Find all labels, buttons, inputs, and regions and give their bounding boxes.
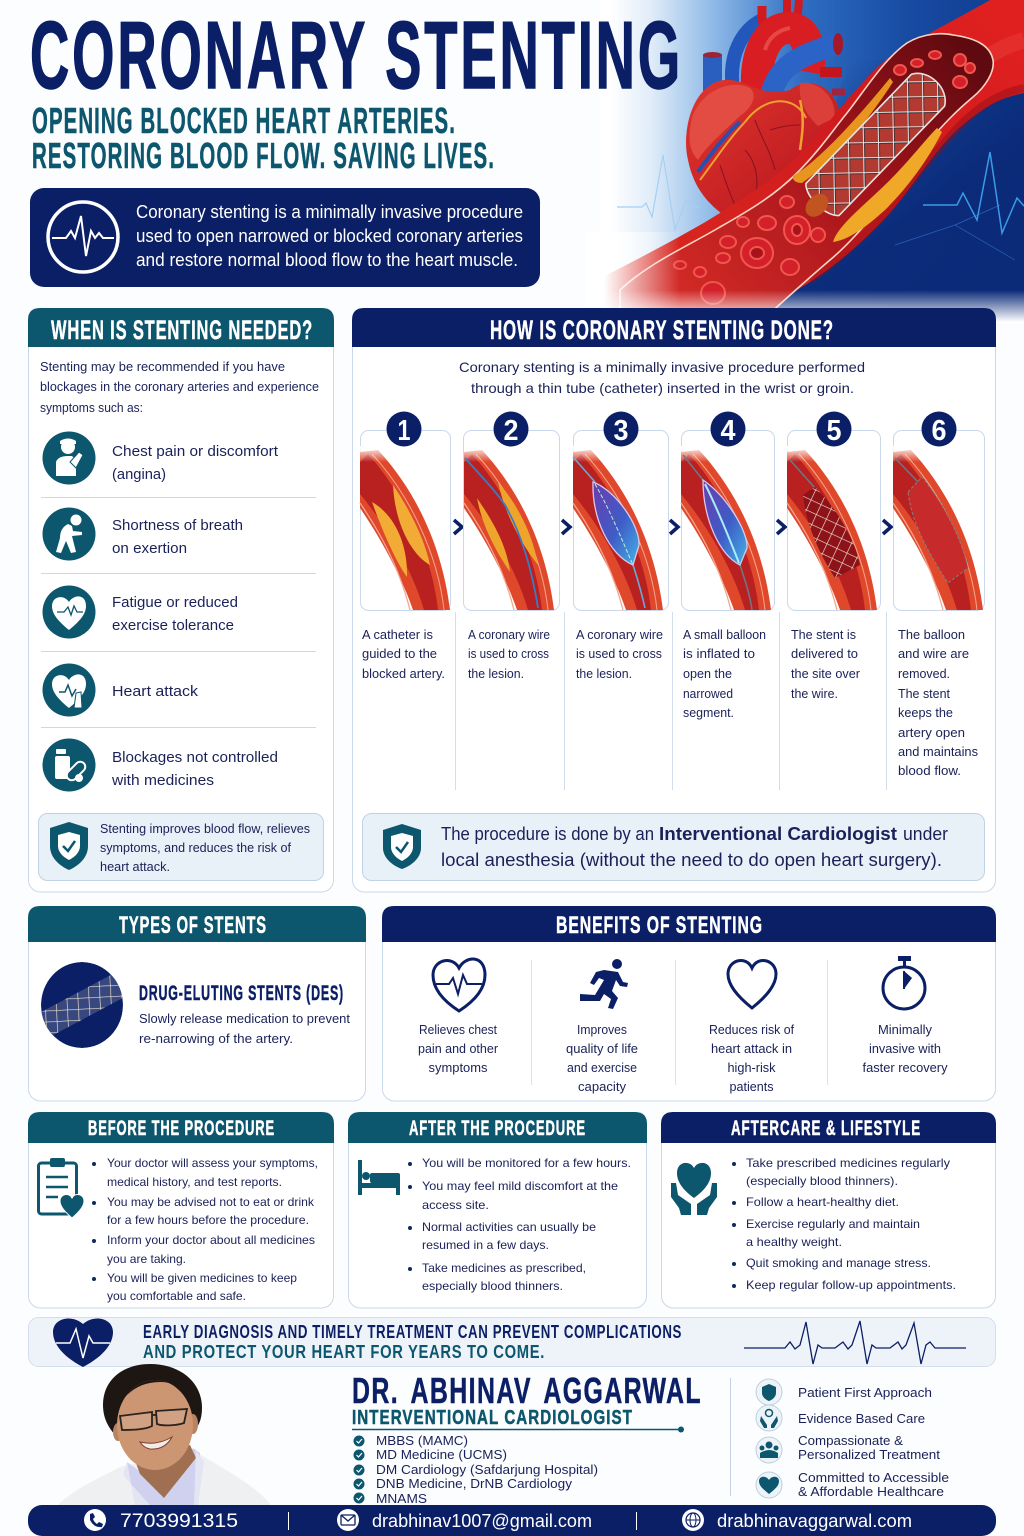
doctor name and title: INTERVENTIONAL CARDIOLOGIST — [352, 1407, 633, 1429]
qualifications list — [354, 1434, 598, 1506]
step 6: and maintains — [898, 745, 978, 759]
step 2: 2 — [504, 415, 518, 447]
values list: Evidence Based Care — [798, 1412, 925, 1426]
benefit 2 text: and exercise — [567, 1061, 637, 1075]
step 1: A catheter is — [362, 628, 433, 642]
doctor name and title — [352, 1370, 702, 1432]
qualifications list: MD Medicine (UCMS) — [376, 1448, 507, 1462]
symptom: fatigue: Fatigue or reduced — [112, 594, 238, 611]
icon: shield — [756, 1379, 782, 1405]
panel header: AFTER THE PROCEDURE — [409, 1117, 586, 1140]
panel: types of stents — [28, 906, 366, 1101]
bullet list: for a few hours before the procedure. — [107, 1213, 309, 1227]
bullet list: Inform your doctor about all medicines — [107, 1233, 315, 1247]
benefit 4 text: faster recovery — [862, 1061, 948, 1075]
step 5 — [787, 412, 880, 701]
icon: heart — [756, 1472, 782, 1498]
step 3: A coronary wire — [576, 628, 663, 642]
symptom: medicines — [111, 749, 278, 789]
panel: aftercare and lifestyle — [661, 1112, 996, 1308]
step 6 — [893, 412, 984, 778]
ECG line — [744, 1321, 966, 1364]
arrow 3 — [670, 520, 678, 534]
heart lobes and vessels — [690, 83, 835, 205]
step 5: the site over — [791, 667, 860, 681]
values list: Patient First Approach — [798, 1386, 932, 1400]
bullet list: You may be advised not to eat or drink — [107, 1195, 315, 1209]
panel header — [382, 906, 996, 942]
step 4: A small balloon — [683, 628, 766, 642]
hero fades — [585, 232, 680, 322]
subtitle: RESTORING BLOOD FLOW. SAVING LIVES. — [32, 135, 495, 176]
ECG trace left — [617, 155, 700, 230]
arrow 4 — [777, 520, 785, 534]
bullet list: Take medicines as prescribed, — [422, 1261, 586, 1275]
symptom: chest pain: Chest pain or discomfort — [112, 443, 279, 460]
bullet list: resumed in a few days. — [422, 1238, 549, 1252]
website: drabhinavaggarwal.com — [717, 1511, 912, 1531]
benefit 2 text: quality of life — [566, 1042, 638, 1056]
bullet list: medical history, and test reports. — [107, 1175, 282, 1189]
bullet list: You may feel mild discomfort at the — [422, 1179, 618, 1193]
benefit 1 text: Relieves chest — [419, 1023, 497, 1037]
symptom: breath: on exertion — [112, 540, 187, 557]
benefit 1 text — [418, 1023, 498, 1075]
panel header — [661, 1112, 996, 1143]
bullet list: Keep regular follow-up appointments. — [746, 1278, 956, 1292]
icon: heart with ECG — [433, 959, 485, 1011]
panel header — [348, 1112, 647, 1143]
intro text: through a thin tube (catheter) inserted in the wrist or groin. — [471, 380, 854, 396]
stent type description — [139, 1011, 350, 1046]
benefit 3 text: heart attack in — [711, 1042, 792, 1056]
heart body — [686, 80, 839, 216]
step 2: the lesion. — [468, 667, 524, 681]
bullet list: access site. — [422, 1198, 489, 1212]
subtitle — [32, 100, 495, 176]
step 3: the lesion. — [576, 667, 632, 681]
artery lumen — [620, 34, 993, 316]
arrow 5 — [883, 520, 891, 534]
icon: heart attack — [42, 664, 96, 716]
bullet list: Take prescribed medicines regularly — [746, 1156, 950, 1170]
intro text: blockages in the coronary arteries and experience — [40, 380, 319, 394]
step 4: 4 — [720, 415, 736, 447]
symptom: heart attack: Heart attack — [112, 683, 199, 700]
bullet list: you comfortable and safe. — [107, 1289, 246, 1303]
values list: Personalized Treatment — [798, 1448, 941, 1462]
symptom: fatigue — [112, 594, 238, 634]
icon: stent image — [41, 962, 123, 1048]
icon: heart in hands — [671, 1163, 717, 1215]
icon: hospital bed — [358, 1160, 400, 1195]
step 6: 6 — [932, 415, 946, 447]
benefit 3 text: patients — [730, 1080, 774, 1094]
benefit 2 text — [566, 1023, 638, 1094]
panel header: TYPES OF STENTS — [119, 912, 267, 939]
qualifications list: MNAMS — [376, 1492, 427, 1506]
step 1: blocked artery. — [362, 667, 445, 681]
bullet list: Follow a heart-healthy diet. — [746, 1195, 899, 1209]
icon: phone — [84, 1509, 106, 1531]
arrow 1 — [454, 520, 462, 534]
benefit 4 text — [862, 1023, 948, 1075]
step 4: narrowed — [683, 687, 733, 701]
icon: fatigue heart — [42, 586, 96, 638]
symptom: breath — [112, 517, 243, 557]
step 6: artery open — [898, 726, 965, 740]
stent type description: Slowly release medication to prevent — [139, 1011, 350, 1026]
step 6: removed. — [898, 667, 950, 681]
qualifications list: DM Cardiology (Safdarjung Hospital) — [376, 1463, 598, 1477]
bullet list: a healthy weight. — [746, 1235, 842, 1249]
step 1: 1 — [398, 415, 410, 447]
bullet list — [410, 1156, 631, 1293]
bullet list — [94, 1156, 318, 1303]
step 3 — [573, 412, 668, 681]
callout: stenting benefit: Stenting improves blood flow, relieves — [100, 822, 310, 836]
step 5: 5 — [826, 415, 842, 447]
panel header — [28, 308, 334, 347]
benefit 3 text: Reduces risk of — [709, 1023, 795, 1037]
artery wall — [597, 0, 1024, 316]
banner text: EARLY DIAGNOSIS AND TIMELY TREATMENT CAN PREVENT COMPLICATIONS — [143, 1322, 682, 1342]
icon: shortness of breath — [42, 508, 96, 560]
doctor name and title: DR. ABHINAV AGGARWAL — [352, 1370, 702, 1411]
qualifications list: MBBS (MAMC) — [376, 1434, 468, 1448]
intro text: symptoms such as: — [40, 401, 143, 415]
panel header — [28, 906, 366, 942]
step 2 — [464, 412, 560, 681]
step 3: 3 — [614, 415, 628, 447]
callout: stenting benefit — [38, 814, 324, 880]
panel: how is coronary stenting done — [352, 308, 996, 892]
plaque — [793, 78, 893, 183]
email address: drabhinav1007@gmail.com — [372, 1511, 592, 1531]
panel header: BENEFITS OF STENTING — [556, 912, 763, 939]
icon: chest pain — [42, 432, 96, 484]
step 4: segment. — [683, 706, 734, 720]
banner text: AND PROTECT YOUR HEART FOR YEARS TO COME. — [143, 1342, 545, 1362]
icon: people — [756, 1437, 782, 1463]
callout: stenting benefit: symptoms, and reduces the risk of — [100, 841, 292, 855]
stent — [791, 66, 953, 231]
bullet list: Normal activities can usually be — [422, 1220, 596, 1234]
step 6: The stent — [898, 687, 951, 701]
benefit 3 text — [709, 1023, 795, 1094]
panel: before the procedure — [28, 1112, 334, 1308]
symptom: medicines: with medicines — [111, 772, 214, 789]
step 2: A coronary wire — [468, 628, 550, 642]
benefit 2 text: capacity — [578, 1080, 627, 1094]
intro text: and restore normal blood flow to the heart muscle. — [136, 250, 518, 270]
bullet list: especially blood thinners. — [422, 1279, 563, 1293]
bullet list: Quit smoking and manage stress. — [746, 1256, 931, 1270]
step 4: open the — [683, 667, 732, 681]
values list: Committed to Accessible — [798, 1471, 949, 1485]
step 1: guided to the — [362, 647, 437, 661]
ECG trace right — [923, 152, 1024, 233]
step 4 — [681, 412, 774, 720]
hero illustration: heart and stented artery — [585, 0, 1024, 322]
icon: globe — [682, 1509, 704, 1531]
symptom: breath: Shortness of breath — [112, 517, 243, 534]
benefit 3 text: high-risk — [728, 1061, 776, 1075]
red blood cells — [674, 51, 975, 304]
benefit 2 text: Improves — [577, 1023, 627, 1037]
icon: email — [337, 1509, 359, 1531]
panel: benefits of stenting — [382, 906, 996, 1101]
symptom: medicines: Blockages not controlled — [112, 749, 278, 766]
step 5: delivered to — [791, 647, 858, 661]
icon: hands care — [756, 1405, 782, 1431]
bullet list: Exercise regularly and maintain — [746, 1217, 920, 1231]
intro text — [459, 359, 865, 396]
symptom: chest pain — [112, 443, 279, 483]
benefit 4 text: Minimally — [878, 1023, 933, 1037]
phone number: 7703991315 — [120, 1510, 238, 1532]
step 6: keeps the — [898, 706, 953, 720]
banner text — [143, 1322, 682, 1362]
step 4: is inflated to — [683, 647, 755, 661]
bullet list: You will be monitored for a few hours. — [422, 1156, 631, 1170]
intro text: Coronary stenting is a minimally invasive procedure — [136, 202, 523, 222]
panel header: AFTERCARE & LIFESTYLE — [731, 1117, 921, 1140]
icon: heart with pulse — [53, 1318, 113, 1367]
panel header — [352, 308, 996, 347]
step 5: the wire. — [791, 687, 838, 701]
intro box — [30, 188, 540, 287]
icon: runner — [580, 959, 628, 1009]
step 6: The balloon — [898, 628, 965, 642]
callout: interventional cardiologist — [362, 814, 984, 880]
icon: stopwatch — [883, 956, 925, 1009]
callout: interventional cardiologist: local anesthesia (without the need to do open heart surgery). — [441, 850, 942, 870]
callout: interventional cardiologist: The procedure is done by an — [441, 824, 654, 844]
step 1 — [360, 412, 450, 681]
bullet list: Your doctor will assess your symptoms, — [107, 1156, 318, 1170]
bullet list: You will be given medicines to keep — [107, 1271, 297, 1285]
symptom: fatigue: exercise tolerance — [112, 617, 234, 634]
doctor photo — [58, 1364, 271, 1505]
intro text: Coronary stenting is a minimally invasive procedure performed — [459, 359, 865, 375]
panel header: WHEN IS STENTING NEEDED? — [51, 315, 313, 345]
bullet list: you are taking. — [107, 1252, 186, 1266]
arrow 2 — [562, 520, 570, 534]
intro text — [136, 202, 523, 270]
values list: & Affordable Healthcare — [798, 1485, 944, 1499]
icon: medicines — [42, 738, 96, 792]
symptom: chest pain: (angina) — [112, 466, 166, 483]
step 3: is used to cross — [576, 647, 662, 661]
step 2: is used to cross — [468, 647, 549, 661]
stent type description: re-narrowing of the artery. — [139, 1031, 293, 1046]
values list: Compassionate & — [798, 1434, 904, 1448]
icon: ECG circle — [48, 202, 118, 272]
panel header — [28, 1112, 334, 1143]
contact footer bar — [28, 1505, 996, 1536]
subtitle: OPENING BLOCKED HEART ARTERIES. — [32, 100, 456, 141]
intro text: used to open narrowed or blocked coronary arteries — [136, 226, 523, 246]
panel: after the procedure — [348, 1112, 647, 1308]
step 6: blood flow. — [898, 764, 961, 778]
panel: when is stenting needed — [28, 308, 334, 892]
step 5: The stent is — [791, 628, 856, 642]
callout: interventional cardiologist: Interventional Cardiologist — [659, 824, 897, 844]
callout: interventional cardiologist: under — [903, 824, 948, 844]
benefit 1 text: pain and other — [418, 1042, 498, 1056]
intro text — [40, 360, 319, 415]
step 6: and wire are — [898, 647, 969, 661]
benefit 1 text: symptoms — [428, 1061, 488, 1075]
heart vessels — [703, 0, 845, 100]
bullet list — [734, 1156, 956, 1292]
stent type name: DRUG-ELUTING STENTS (DES) — [139, 982, 344, 1005]
icon: clipboard with heart — [38, 1158, 84, 1218]
callout: stenting benefit: heart attack. — [100, 860, 170, 874]
benefit 4 text: invasive with — [869, 1042, 941, 1056]
panel header: BEFORE THE PROCEDURE — [88, 1117, 275, 1140]
qualifications list: DNB Medicine, DrNB Cardiology — [376, 1477, 573, 1491]
banner: early diagnosis — [28, 1318, 996, 1367]
values list — [756, 1379, 949, 1499]
icon: heart outline — [728, 960, 776, 1008]
bullet list: (especially blood thinners). — [746, 1174, 898, 1188]
intro text: Stenting may be recommended if you have — [40, 360, 285, 374]
